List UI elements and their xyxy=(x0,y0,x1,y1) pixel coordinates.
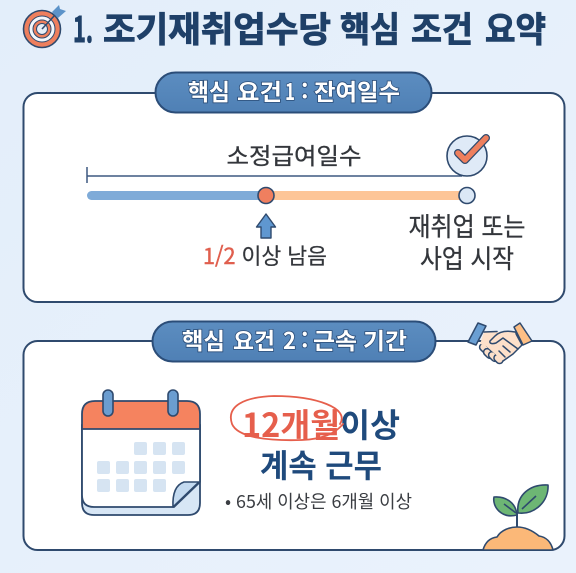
heading pill: requirement 2: 핵심 xyxy=(182,322,225,356)
note: age 65 and over: • 65세 이상은 6개월 이상 xyxy=(225,488,412,514)
icon: sprout xyxy=(483,485,553,550)
timeline bar xyxy=(87,188,475,204)
callout: 12 months or more: 12개월이상 xyxy=(242,399,400,447)
heading pill: requirement 1: 잔여일수 xyxy=(314,73,400,107)
span bracket line xyxy=(87,167,462,183)
label: total benefit days: 소정급여일수 xyxy=(226,137,362,171)
text: continuous employment: 계속 근무 xyxy=(260,441,382,487)
heading pill: requirement 2 xyxy=(152,322,436,362)
label: re-employment or business start xyxy=(408,207,526,276)
title xyxy=(73,2,546,53)
heading pill: requirement 2: 요건 xyxy=(233,322,275,356)
panel: requirement 1, remaining days xyxy=(24,72,564,302)
heading pill: requirement 2: 기간 xyxy=(363,322,407,356)
title: 조건 xyxy=(411,2,473,53)
title: 1. xyxy=(73,2,93,53)
heading pill: requirement 1: 요건 xyxy=(237,73,282,107)
heading pill: requirement 2: 2 xyxy=(283,322,296,356)
title: 조기재취업수당 xyxy=(103,2,331,53)
icon: handshake xyxy=(468,323,532,365)
label: re-employment or business start: 재취업 또는 xyxy=(408,207,526,244)
icon: calendar xyxy=(82,390,200,515)
heading pill: requirement 1: 1 xyxy=(285,73,295,107)
label: half or more remaining: 1/2 이상 남음 xyxy=(203,239,327,271)
heading pill: requirement 1 xyxy=(156,72,432,112)
icon: target with dart xyxy=(24,5,66,48)
heading pill: requirement 1: : xyxy=(301,73,308,107)
title: 핵심 xyxy=(340,2,400,53)
calendar date cells xyxy=(97,442,185,492)
label: re-employment or business start: 사업 시작 xyxy=(420,239,514,276)
heading pill: requirement 1: 핵심 xyxy=(188,73,230,107)
icon: check mark circle xyxy=(447,136,487,176)
arrow: up to midpoint xyxy=(256,214,276,238)
heading pill: requirement 2: 근속 xyxy=(313,322,357,356)
panel: requirement 2, tenure xyxy=(24,322,564,550)
title: 요약 xyxy=(485,2,546,53)
heading pill: requirement 2: : xyxy=(301,322,308,356)
